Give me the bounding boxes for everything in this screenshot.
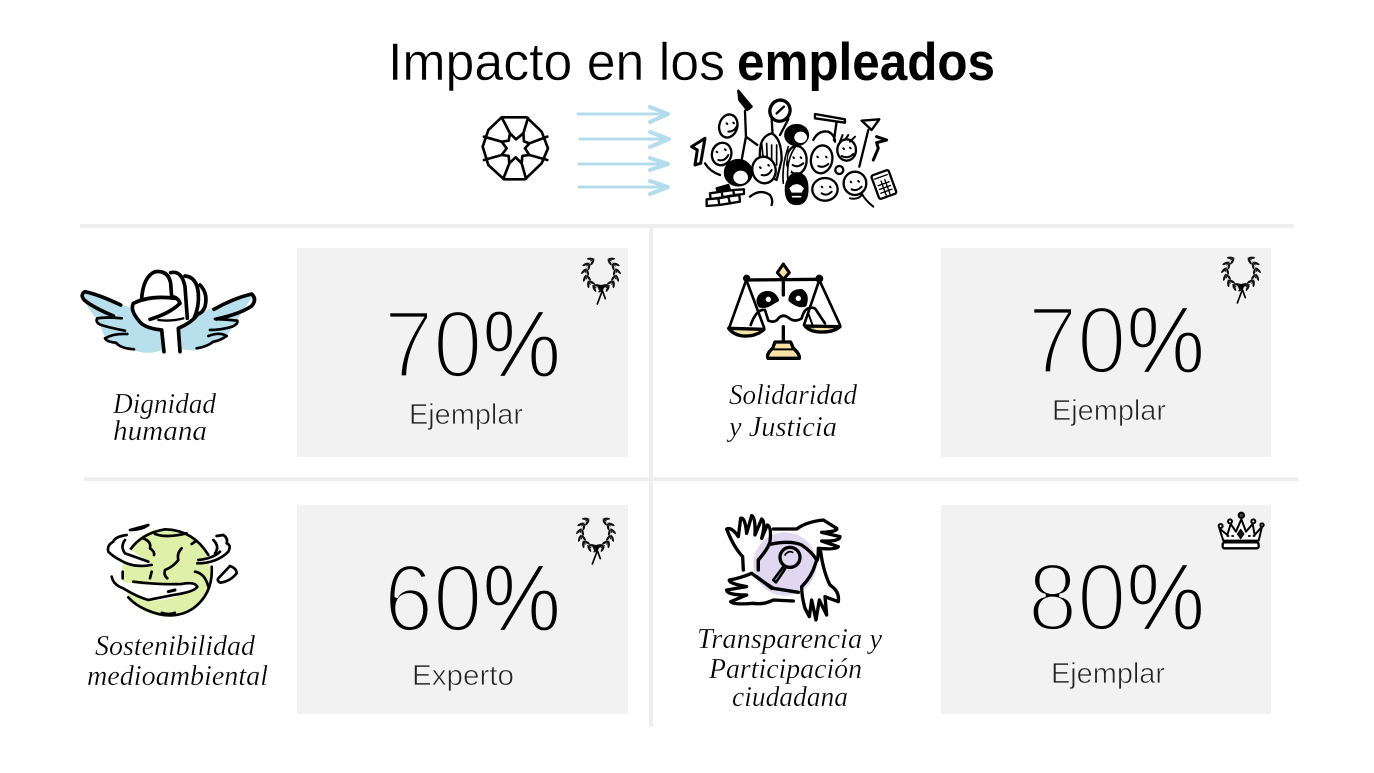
panel: score 70% Ejemplar: 70% (384, 291, 561, 398)
label: y Justicia (726, 412, 837, 443)
icon: winged fist (82, 271, 254, 353)
label: humana (113, 416, 207, 447)
label (87, 631, 268, 692)
bricks (707, 185, 744, 206)
panel: score 70% Ejemplar (297, 248, 628, 457)
icon: four hands with magnifier (727, 516, 840, 620)
facial features (717, 123, 873, 207)
panel: score 60% Experto (297, 505, 628, 714)
panel: score 80% Ejemplar: 80% (1028, 544, 1205, 651)
title: Impacto en los (388, 33, 725, 92)
faces (709, 112, 866, 205)
panel: score 70% Ejemplar: 70% (1028, 287, 1205, 394)
label: Participación (708, 654, 862, 685)
clipboard (871, 170, 897, 199)
panel: score 70% Ejemplar: Ejemplar (1052, 395, 1166, 427)
icon: scales of justice (729, 264, 840, 358)
icon: globe with clouds (108, 525, 237, 617)
label (697, 624, 883, 713)
icon: octagonal logo (483, 117, 548, 179)
label: Sostenibilidad (95, 631, 256, 662)
panel: score 80% Ejemplar (941, 505, 1271, 714)
panel: score 60% Experto: 60% (384, 545, 561, 652)
label: Solidaridad (729, 380, 858, 411)
label (112, 389, 217, 447)
panel: score 60% Experto: Experto (412, 660, 514, 692)
title: empleados (737, 33, 995, 92)
title (388, 33, 995, 92)
panel: Transparencia y Participación icon and label (697, 516, 883, 713)
label: Dignidad (112, 389, 217, 420)
panel: Dignidad humana icon and label (82, 271, 254, 447)
panel: score 80% Ejemplar: Ejemplar (1051, 658, 1165, 690)
label: medioambiental (87, 661, 268, 692)
icon: laurel wreath (1220, 254, 1262, 303)
label: Transparencia y (697, 624, 883, 655)
panel: score 70% Ejemplar: Ejemplar (409, 399, 523, 431)
dark hair and beard faces (725, 125, 808, 204)
label: ciudadana (732, 682, 848, 713)
panel: score 70% Ejemplar (941, 248, 1271, 457)
icon: laurel wreath (580, 255, 622, 304)
label (726, 380, 858, 443)
arrows: impact direction (578, 107, 669, 194)
icon: crown (1219, 513, 1264, 548)
panel: Solidaridad y Justicia icon and label (726, 264, 858, 443)
pencil and raised tools (692, 91, 887, 175)
icon: crowd of employees (692, 91, 897, 207)
dividers (80, 224, 1298, 727)
icon: laurel wreath (575, 515, 617, 564)
panel: Sostenibilidad medioambiental icon and label (87, 525, 268, 692)
